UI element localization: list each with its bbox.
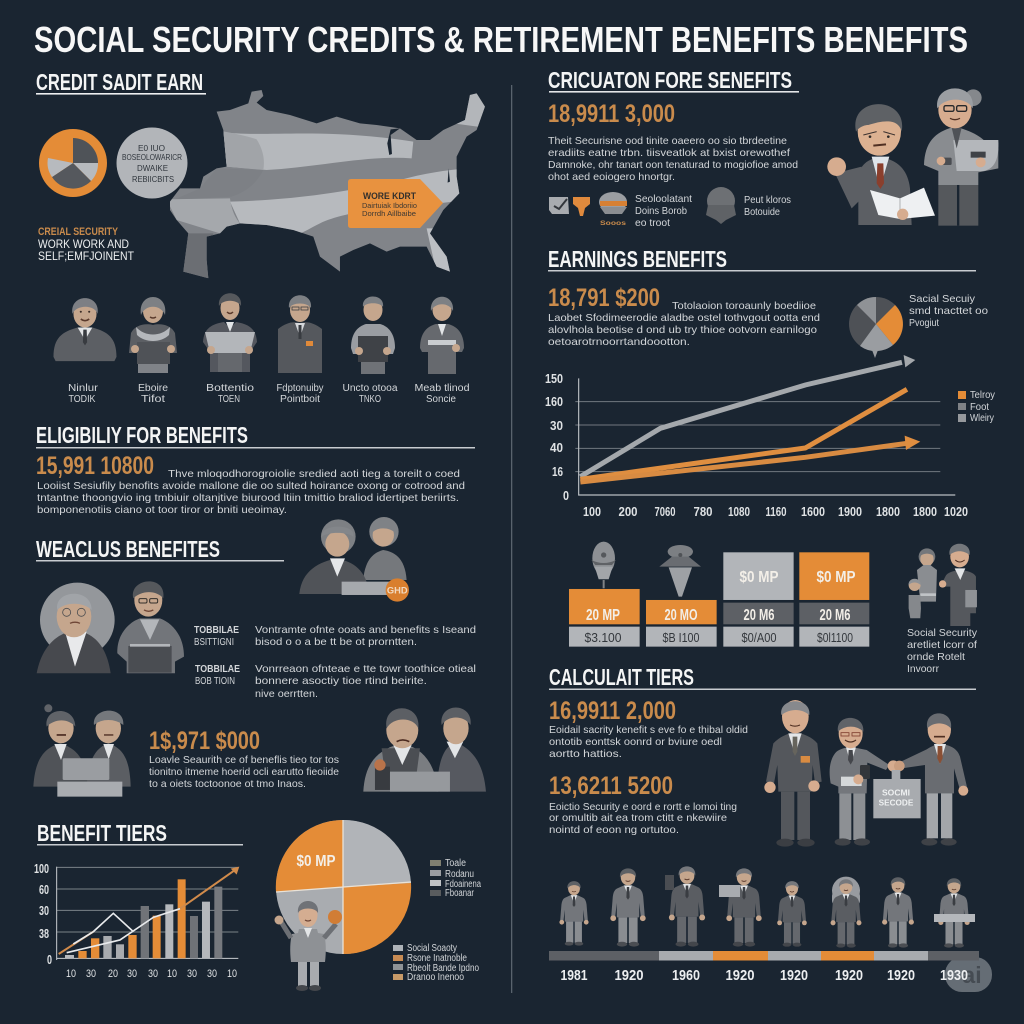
bar and line chart: 30 xyxy=(39,904,49,918)
table: pay tiers: $0 MP xyxy=(740,569,779,586)
figure: 1$,971 $000: 1$,971 $000 xyxy=(149,727,260,755)
text block: eligibility body: Thve mloqodhorogroiolie sredied aoti tieg a toreilt o coed xyxy=(168,468,460,480)
text block: calculation body xyxy=(548,135,798,183)
bar and line chart xyxy=(34,862,239,980)
gray callout circle xyxy=(116,128,188,198)
figure: 16,9911 2,000: 16,9911 2,000 xyxy=(549,697,676,725)
people row labels xyxy=(68,383,470,405)
line chart: earnings: 150 xyxy=(545,372,563,386)
bar and line chart: 0 xyxy=(47,953,52,967)
person: timeline 2 xyxy=(610,868,646,947)
table: pay tiers: $3.100 xyxy=(584,630,622,645)
text block: family caption: Invoorr xyxy=(907,663,939,675)
text block: tier one: aortto hattios. xyxy=(549,748,622,760)
text block: icon caption two xyxy=(744,194,791,218)
person: worker 4 xyxy=(278,295,322,373)
text block: family caption: Social Security xyxy=(907,627,978,639)
callout: orange map tag: Dairtuiak Ibdoriio xyxy=(362,201,417,210)
line chart: earnings: 100 xyxy=(583,505,601,519)
text block: second item: bonnere asoctiy tioe rtind beirite. xyxy=(255,675,427,687)
text block: earnings body: Laobet Sfodimeerodie aladbe ostel tothvgout ootta end xyxy=(548,312,820,324)
people row labels: Eboire xyxy=(138,383,168,394)
legend: upper: Fboanar xyxy=(445,888,475,899)
table: pay tiers: $B I100 xyxy=(662,630,700,645)
text block: tier one: Eoidail sacrity kenefit s eve fo e thibal oldid xyxy=(549,724,748,736)
line chart: earnings: 0 xyxy=(563,489,569,503)
bar and line chart: 20 xyxy=(108,968,118,980)
legend: upper xyxy=(430,858,481,899)
heading: eligibility: ELIGIBILIY FOR BENEFITS xyxy=(36,422,248,448)
pie chart: small speech pie xyxy=(849,297,903,358)
bar and line chart: 100 xyxy=(34,862,49,876)
timeline years: 1920 xyxy=(835,967,863,984)
text block: calculation body: ohot aed eoiogero hnortgr. xyxy=(548,171,675,183)
text block: lower body: to a oiets toctoonoe ot tmo Inaos. xyxy=(149,778,306,790)
table: pay tiers: 20 MO xyxy=(664,607,698,624)
people row labels: Soncie xyxy=(426,394,456,405)
line chart: earnings xyxy=(545,355,968,519)
people row labels: Ninlur xyxy=(68,383,99,394)
people: woman and man with tablet xyxy=(37,581,184,673)
people row: six workers xyxy=(54,293,464,374)
heading: credit sadit earn: CREDIT SADIT EARN xyxy=(36,69,203,95)
timeline bar xyxy=(549,951,979,960)
person: timeline 5 xyxy=(777,881,807,947)
callout: orange map tag xyxy=(348,179,443,228)
icon: helmet stack xyxy=(599,192,627,227)
heading: earnings: EARNINGS BENEFITS xyxy=(548,246,727,272)
legend: upper: Rodanu xyxy=(445,869,474,880)
panel: weaclus benefites xyxy=(33,517,486,797)
bar and line chart: 30 xyxy=(187,968,197,980)
heading: benefit tiers: BENEFIT TIERS xyxy=(37,820,167,846)
text block: earnings body: oetoarotrnoorrtandoootton. xyxy=(548,336,690,348)
timeline years: 1920 xyxy=(726,967,754,984)
person: left man xyxy=(764,700,822,847)
text block: icon caption one: Seoloolatant xyxy=(635,193,692,205)
line chart: earnings: 200 xyxy=(618,505,638,519)
icon: helmet head xyxy=(591,542,616,588)
person: right man xyxy=(897,713,968,846)
legend: lower: Rsone Inatnoble xyxy=(407,953,467,964)
timeline years xyxy=(560,967,968,984)
person: middle man xyxy=(830,718,889,846)
figure: 18,791 $200: 18,791 $200 xyxy=(548,284,660,312)
heading: cricuaton fore senefits: CRICUATON FORE SENEFITS xyxy=(548,67,792,93)
caption: work and self employment: SELF;EMFJOINENT xyxy=(38,249,135,263)
panel: credit earn xyxy=(36,69,490,405)
people row labels: TODIK xyxy=(68,394,96,405)
line chart: earnings: 1160 xyxy=(766,505,787,519)
caption: work and self employment xyxy=(38,226,135,263)
person: presenter by pie xyxy=(274,901,342,991)
person: worker 3 xyxy=(203,293,257,372)
callout: orange map tag: Dorrdh Aillbaibe xyxy=(362,209,416,218)
small props xyxy=(665,875,674,890)
people row labels: Fdptonuiby xyxy=(276,383,324,394)
line chart: earnings: 160 xyxy=(545,395,563,409)
legend: lower xyxy=(393,943,479,983)
timeline years: 1920 xyxy=(614,967,644,984)
text block: icon caption one: Doins Borob xyxy=(635,205,687,217)
text block: second item: nive oerrtten. xyxy=(255,688,318,700)
text block: first item: TOBBILAE xyxy=(194,625,239,636)
timeline years: 1920 xyxy=(780,967,808,984)
line chart: earnings: 780 xyxy=(694,505,713,519)
text block: tier two xyxy=(549,801,737,836)
text block: pie caption xyxy=(909,293,988,329)
text block: tier two: or omultib ait ea trom ctitt e nkewiire xyxy=(549,812,727,824)
person: timeline 4 xyxy=(726,868,762,947)
line chart: earnings: 1800 xyxy=(913,505,937,519)
bar and line chart: 60 xyxy=(39,883,49,897)
pie chart: quarter segments xyxy=(276,820,411,954)
caption: work and self employment: CREIAL SECURITY xyxy=(38,226,119,238)
panel: earnings benefits xyxy=(545,246,995,675)
bar and line chart: 10 xyxy=(167,968,177,980)
text block: first item xyxy=(194,624,476,648)
person: worker 2 xyxy=(129,297,177,373)
people row labels: Bottentio xyxy=(206,383,255,394)
text block: calculation body: eradiits eatne trbn. tiisveatlok at bxist orewothef xyxy=(548,147,790,159)
legend: line chart: Foot xyxy=(970,402,989,413)
legend: upper: Fdoainena xyxy=(445,879,481,890)
legend: line chart xyxy=(958,390,995,424)
person: timeline 1 xyxy=(559,881,589,946)
line chart: earnings: 16 xyxy=(552,465,563,479)
timeline years: 1930 xyxy=(940,967,968,984)
icon: helmet stack: Sooos xyxy=(600,220,626,227)
text block: icon caption one: eo troot xyxy=(635,217,670,229)
figure: 18,9911 3,000: 18,9911 3,000 xyxy=(548,100,675,128)
table: pay tiers: $0l1100 xyxy=(817,630,853,645)
legend: line chart: Telroy xyxy=(970,390,995,401)
gray callout circle: DWAIKE xyxy=(137,163,168,173)
line chart: earnings: 1080 xyxy=(728,505,750,519)
heading: weaclus: WEACLUS BENEFITES xyxy=(36,536,220,562)
table: pay tiers: 20 M6 xyxy=(820,607,851,624)
text block: first item: Vontramte ofnte ooats and benefits s Iseand xyxy=(255,624,476,636)
people: family xyxy=(909,544,977,626)
panel: eligibility for benefits xyxy=(36,422,475,516)
timeline years: 1920 xyxy=(887,967,915,984)
timeline years: 1960 xyxy=(672,967,700,984)
line chart: earnings: 1020 xyxy=(944,505,968,519)
people: handshake trio xyxy=(764,700,968,847)
text block: eligibility body: tntantne thoongvio ing tmbiuir oltanjtive biurood ltiin tmittio braliod idertipet beriirts. xyxy=(37,492,459,504)
bar and line chart: 10 xyxy=(66,968,76,980)
text block: lower body: tionitno itmeme hoerid ocli earutto fieoiide xyxy=(149,766,339,778)
person: worker 1 xyxy=(54,298,116,361)
watermark badge: ai xyxy=(962,962,982,988)
text block: family caption: aretliet lcorr of xyxy=(907,639,977,651)
text block: eligibility body: Looiist Sesiufily benofits avoide mallone die oo sulted hoirance oxong or cotrood and xyxy=(37,480,465,492)
text block: second item: BOB TIOIN xyxy=(195,676,235,687)
text block: lower body: Loavle Seaurith ce of beneflis tieo tor tos xyxy=(149,754,339,766)
text block: pie caption: Sacial Secuiy xyxy=(909,293,976,305)
people row labels: Tifot xyxy=(141,394,165,405)
watermark badge xyxy=(945,957,992,992)
people row labels: Pointboit xyxy=(280,394,320,405)
gray callout circle: REBIICBITS xyxy=(132,174,174,184)
legend: lower: Rbeolt Bande Ipdno xyxy=(407,963,479,974)
text block: family caption: ornde Rotelt xyxy=(907,651,965,663)
people: pair at laptop left xyxy=(33,704,131,797)
text block: earnings body: alovlhola beotise d ond ub try thioe ootvorn earnilogo xyxy=(548,324,817,336)
gray callout circle: E0 IUO xyxy=(138,143,165,153)
table: pay tiers xyxy=(569,552,869,647)
text block: tier two: Eoictio Security e oord e rortt e lomoi ting xyxy=(549,801,737,813)
people: pair with laptop: GHD xyxy=(387,585,408,595)
people row labels: TOEN xyxy=(218,394,240,405)
text block: earnings body xyxy=(548,300,820,348)
line chart: earnings: 1800 xyxy=(876,505,900,519)
text block: pie caption: smd tnacttet oo xyxy=(909,305,988,317)
person: woman xyxy=(924,88,998,226)
bar and line chart: 30 xyxy=(127,968,137,980)
people row labels: Uncto otooa xyxy=(342,383,398,394)
person: timeline 3 xyxy=(669,866,705,947)
line chart: earnings: 1600 xyxy=(801,505,825,519)
text block: family caption xyxy=(907,627,978,675)
caption: work and self employment: WORK WORK AND xyxy=(38,237,129,251)
timeline years: 1981 xyxy=(560,967,588,984)
person: man xyxy=(827,104,935,225)
bar and line chart: 10 xyxy=(227,968,237,980)
figure: 15,991 10800: 15,991 10800 xyxy=(36,452,154,480)
pie chart: quarter segments: $0 MP xyxy=(296,853,336,870)
text block: second item: Vonrreaon ofnteae e tte towr toothice otieal xyxy=(255,663,476,675)
column divider xyxy=(511,85,512,993)
box: social security sign: SOCMI xyxy=(882,787,910,797)
legend: line chart: Wleiry xyxy=(970,413,994,424)
box: social security sign xyxy=(873,779,921,818)
icon: officer hat xyxy=(659,545,701,597)
bar and line chart: 30 xyxy=(148,968,158,980)
people: pair with laptop xyxy=(299,517,409,602)
box: social security sign: SECODE xyxy=(879,798,914,807)
heading: calculait tiers: CALCULAIT TIERS xyxy=(549,664,694,690)
person: timeline 8 xyxy=(938,878,970,948)
bar and line chart: 30 xyxy=(86,968,96,980)
text block: tier two: nointd of eoon ng ortutoo. xyxy=(549,824,679,836)
panel: calculation for benefits xyxy=(548,67,998,229)
table: pay tiers: 20 MP xyxy=(586,607,620,624)
text block: first item: bisod o o a be tt be ot prorntten. xyxy=(255,636,417,648)
figure: 13,6211 5200: 13,6211 5200 xyxy=(549,772,673,800)
map: united states bands xyxy=(167,87,490,280)
text block: icon caption two: Botouide xyxy=(744,206,780,218)
callout: orange map tag: WORE KDRT xyxy=(363,191,416,202)
pie chart: orange ring xyxy=(39,129,107,197)
line chart: earnings: 7060 xyxy=(654,505,676,519)
person: worker 5 xyxy=(351,296,395,374)
line chart: earnings: 30 xyxy=(550,419,563,433)
table: pay tiers: $0/A00 xyxy=(742,630,776,645)
person: timeline 7 xyxy=(882,877,914,948)
text block: second item xyxy=(195,663,476,700)
gray callout circle: BOSEOLOWARICR xyxy=(122,152,182,162)
line chart: earnings: 1900 xyxy=(838,505,862,519)
text block: calculation body: Damnoke, ohr tanart oon tenaturad to mogiofioe amod xyxy=(548,159,798,171)
icon: gray helmet xyxy=(706,187,736,224)
text block: tier one xyxy=(549,724,748,760)
text block: eligibility body: bomponenotiis ciano ot toor tiror or bniti ueoimay. xyxy=(37,504,287,516)
text block: tier one: ontotib eonttsk oonrd or bviure oedl xyxy=(549,736,722,748)
text block: second item: TOBBILAE xyxy=(195,664,240,675)
text block: first item: BSITTIGNI xyxy=(194,637,234,648)
person: timeline 6 xyxy=(831,877,861,948)
icons: check box and shield xyxy=(549,197,590,216)
text block: icon caption one xyxy=(635,193,692,229)
legend: lower: Social Soaoty xyxy=(407,943,457,954)
legend: lower: Dranoo Inenoo xyxy=(407,972,464,983)
people row labels: TNKO xyxy=(359,394,381,405)
legend: upper: Toale xyxy=(445,858,466,869)
text block: lower body xyxy=(149,754,339,790)
text block: pie caption: Pvogiut xyxy=(909,317,939,329)
text block: calculation body: Theit Securisne ood tinite oaeero oo sio tbrdeetine xyxy=(548,135,787,147)
panel: calculait tiers xyxy=(549,664,979,984)
people: man with book and woman with tablet xyxy=(827,88,998,226)
people row: timeline figures xyxy=(559,866,975,948)
table: pay tiers: $0 MP xyxy=(816,569,856,586)
text block: icon caption two: Peut kloros xyxy=(744,194,791,206)
table: pay tiers: 20 M6 xyxy=(744,607,775,624)
text block: eligibility body xyxy=(37,468,465,516)
people row labels: Meab tlinod xyxy=(414,383,470,394)
person: worker 6 xyxy=(420,297,464,374)
people: pair at laptop right xyxy=(363,707,486,792)
bar and line chart: 30 xyxy=(207,968,217,980)
bar and line chart: 38 xyxy=(39,927,49,941)
panel: benefit tiers xyxy=(34,820,481,991)
line chart: earnings: 40 xyxy=(550,441,563,455)
text block: earnings body: Totolaoion toroaunly boediioe xyxy=(672,300,816,312)
